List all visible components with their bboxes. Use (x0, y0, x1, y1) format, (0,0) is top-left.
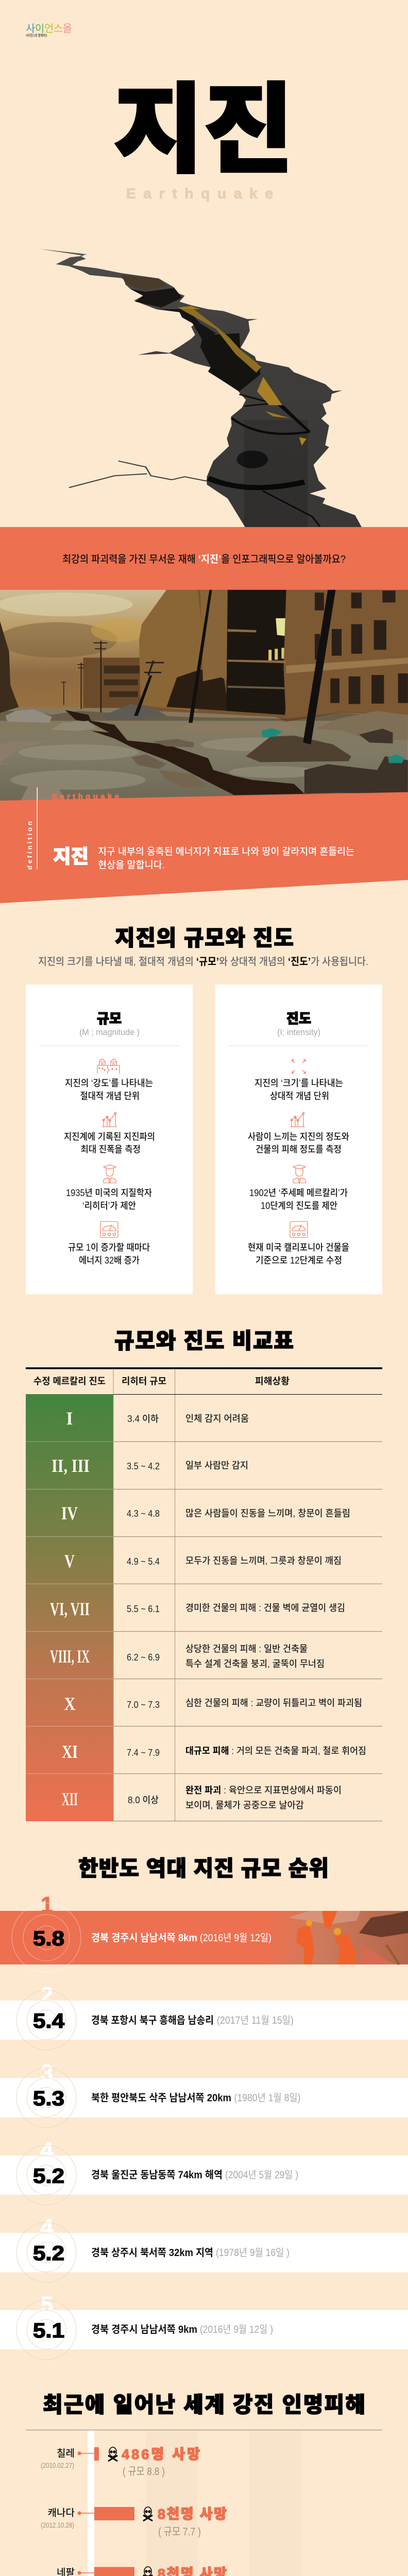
date: (2016년 9월 12일 ) (200, 2324, 273, 2335)
text: felt intensity: 건물의 피해 정도를 측정 (256, 1144, 342, 1155)
divider line (37, 787, 38, 869)
Richter values: 8.0 이상 (128, 1795, 159, 1805)
text: absolute unit: 절대적 개념 단위 (80, 1091, 140, 1101)
intro band (0, 527, 408, 590)
location: 경북 울진군 동남동쪽 74km 해역 (91, 2169, 223, 2181)
location: 경북 상주시 북서쪽 32km 지역 (91, 2247, 213, 2259)
damage descriptions: 특수 설계 건축물 붕괴, 굴뚝이 무너짐 (185, 1659, 325, 1669)
damage descriptions: 모두가 진동을 느끼며, 그릇과 창문이 깨짐 (185, 1556, 342, 1566)
epicentre rings (16, 2223, 76, 2282)
epicentre rings (12, 1903, 81, 1972)
table: magnitude vs intensity (26, 1367, 382, 1821)
photo: destroyed city street (0, 590, 408, 802)
intensity numerals: VIII, IX (50, 1646, 90, 1667)
damage descriptions: 많은 사람들이 진동을 느끼며, 창문이 흔들림 (185, 1509, 350, 1519)
damage descriptions (185, 1414, 366, 1810)
clipped label: Earthquake: Earthquake (52, 792, 119, 801)
value 5.8: 5.8 (33, 1927, 64, 1950)
value 5.4: 5.4 (33, 2010, 65, 2032)
intensity numerals: VI, VII (50, 1599, 90, 1619)
intensity numerals: IV (61, 1503, 78, 1523)
table header: 피해상황 (255, 1376, 290, 1386)
label: I intensity: (I; intensity) (277, 1027, 320, 1037)
value 5.2: 5.2 (33, 2242, 64, 2265)
title: 지진 (113, 76, 294, 185)
rank 4 row: Uljin (0, 2138, 408, 2205)
heading: 진도: 진도 (286, 1011, 311, 1026)
heading: magnitude and intensity: 지진의 규모와 진도 (115, 926, 294, 950)
intensity numerals: V (64, 1551, 75, 1571)
text: energy: 규모 1이 증가할 때마다 (68, 1243, 150, 1253)
damage descriptions: 대규모 피해 : 거의 모든 건축물 파괴, 철로 휘어짐 (185, 1745, 366, 1756)
rank number 2: 2 (41, 1982, 53, 2008)
icon: chart (102, 1112, 117, 1127)
Richter values: 3.5 ~ 4.2 (127, 1461, 160, 1471)
value 5.3: 5.3 (33, 2088, 64, 2110)
date: (1980년 1월 8일) (234, 2092, 301, 2104)
deaths: 486명 사망 (122, 2447, 200, 2462)
bar (94, 2567, 134, 2576)
icon: chart (290, 1112, 305, 1127)
icon: gauge (100, 1222, 118, 1238)
damage descriptions: 완전 파괴 : 육안으로 지표면상에서 파동이 (185, 1785, 342, 1795)
text: California: 현재 미국 캘리포니아 건물을 (248, 1243, 349, 1253)
definition text: 현상을 말합니다. (98, 859, 165, 871)
damage descriptions: 일부 사람만 감지 (185, 1460, 248, 1470)
icon: arrows (292, 1060, 305, 1073)
epicentre rings (16, 2145, 76, 2205)
rank number 3: 3 (41, 2060, 53, 2086)
icon: skull (108, 2447, 117, 2461)
label: M magnitude: (M ; magnitude ) (79, 1027, 140, 1037)
location: 북한 평안북도 삭주 남남서쪽 20km (91, 2092, 231, 2104)
heading: 지진: 지진 (53, 846, 89, 867)
text: California: 기준으로 12단계로 수정 (256, 1255, 342, 1265)
rank number 5: 5 (41, 2292, 53, 2317)
Richter values: 7.4 ~ 7.9 (127, 1748, 160, 1758)
icon: skull (143, 2567, 152, 2576)
text: seismograph: 최대 진폭을 측정 (80, 1144, 141, 1155)
icon: scholar (104, 1165, 116, 1183)
label: definition: definition (26, 821, 33, 870)
location: 경북 포항시 북구 흥해읍 남송리 (91, 2014, 214, 2026)
text: relative unit: 지진의 ‘크기’를 나타내는 (254, 1078, 343, 1088)
panel: magnitude (26, 985, 193, 1294)
panel: intensity (215, 985, 382, 1294)
epicentre rings (16, 2068, 76, 2128)
text: Richter: 1935년 미국의 지질학자 (66, 1188, 152, 1198)
intensity numerals: I (66, 1408, 73, 1429)
photo: rescue workers (268, 1911, 408, 1964)
country: 칠레 (57, 2448, 75, 2459)
heading: recent world earthquakes: 최근에 일어난 세계 강진 인명피해 (43, 2393, 365, 2417)
date: (2010.02.27) (41, 2461, 74, 2469)
row: Chile (41, 2447, 200, 2478)
Richter values: 6.2 ~ 6.9 (127, 1652, 160, 1663)
date: (2004년 5월 29일 ) (225, 2169, 298, 2181)
epicentre rings (16, 1990, 76, 2050)
Richter values: 4.3 ~ 4.8 (127, 1509, 160, 1519)
Richter values: 7.0 ~ 7.3 (127, 1700, 160, 1710)
intensity numerals: XII (62, 1789, 78, 1809)
damage descriptions: 인체 감지 어려움 (185, 1414, 249, 1424)
rank number 1: 1 (41, 1892, 53, 1918)
subtitle: Earthquake: Earthquake (126, 185, 273, 201)
bar (94, 2507, 134, 2520)
value 5.1: 5.1 (33, 2319, 64, 2342)
location: 경북 경주시 남남서쪽 8km (91, 1932, 197, 1944)
subheading: 지진의 크기를 나타낼 때, 절대적 개념의 ‘규모’와 상대적 개념의 ‘진도’가 사용됩니다. (38, 956, 368, 968)
icon: scholar (293, 1165, 305, 1183)
chart: earthquake casualties (26, 2430, 382, 2576)
Richter values: 5.5 ~ 6.1 (127, 1604, 160, 1614)
heading: 규모: 규모 (97, 1011, 122, 1026)
table header (33, 1376, 290, 1386)
rank number 4: 4 (40, 2215, 54, 2240)
bar (94, 2447, 99, 2461)
intensity numerals: II, III (52, 1455, 90, 1476)
intensity numerals (50, 1408, 90, 1809)
text: Mercalli: 1902년 ‘주세페 메르칼리’가 (249, 1188, 348, 1198)
intensity numerals: X (64, 1693, 75, 1714)
rank 1 row (0, 1892, 408, 1972)
location: 경북 경주시 남남서쪽 9km (91, 2324, 197, 2335)
illustration: ground crack (39, 249, 362, 527)
rank number 4: 4 (40, 2138, 54, 2163)
text: felt intensity: 사람이 느끼는 지진의 정도와 (248, 1131, 349, 1142)
table header: 수정 메르칼리 진도 (33, 1376, 106, 1386)
Richter values: 3.4 이하 (127, 1414, 159, 1424)
definition text: 지구 내부의 응축된 에너지가 지표로 나와 땅이 갈라지며 흔들리는 (98, 846, 354, 857)
text: absolute unit: 지진의 ‘강도’를 나타내는 (65, 1078, 153, 1088)
heading: Korean peninsula ranking: 한반도 역대 지진 규모 순위 (78, 1856, 329, 1880)
rank 2 row (0, 1982, 408, 2050)
intro sentence: 최강의 파괴력을 가진 무서운 재해 ‘지진’을 인포그래픽으로 알아볼까요? (62, 553, 346, 565)
magnitude: ( 규모 8.8 ) (123, 2466, 165, 2478)
damage descriptions: 상당한 건물의 피해 : 일반 건축물 (185, 1643, 308, 1654)
rank 5 row (0, 2292, 408, 2360)
magnitude: ( 규모 7.7 ) (158, 2526, 201, 2538)
Richter values (127, 1414, 160, 1805)
value 5.2: 5.2 (33, 2165, 64, 2188)
logo: 사이언스와 함께하는 (26, 33, 47, 38)
rank 4 row: Sangju (0, 2215, 408, 2282)
text: energy: 에너지 32배 증가 (79, 1255, 140, 1265)
text: Richter: ‘리히터’가 제안 (82, 1200, 136, 1211)
text: Mercalli: 10단계의 진도를 제안 (261, 1200, 337, 1211)
damage descriptions: 경미한 건물의 피해 : 건물 벽에 균열이 생김 (185, 1603, 345, 1613)
text: relative unit: 상대적 개념 단위 (270, 1091, 329, 1101)
damage descriptions: 심한 건물의 피해 : 교량이 뒤틀리고 벽이 파괴됨 (185, 1698, 362, 1708)
icon: cracked houses (97, 1059, 120, 1074)
logo: 사이언스올 (26, 23, 72, 35)
text: seismograph: 지진계에 기록된 지진파의 (64, 1131, 155, 1142)
icon: gauge (290, 1222, 308, 1238)
Richter values: 4.9 ~ 5.4 (127, 1556, 160, 1567)
table header: 리히터 규모 (122, 1376, 166, 1386)
damage descriptions: 보이며, 물체가 공중으로 날아감 (185, 1800, 304, 1810)
heading: comparison table: 규모와 진도 비교표 (114, 1329, 294, 1353)
intensity numerals: XI (62, 1741, 78, 1762)
date: (2016년 9월 12일) (200, 1932, 271, 1944)
deaths: 8천명 사망 (158, 2506, 227, 2522)
date: (2012.10.28) (41, 2521, 74, 2529)
icon: skull (143, 2507, 152, 2521)
date: (1978년 9월 16일 ) (216, 2247, 290, 2259)
date: (2017년 11월 15일) (217, 2014, 294, 2026)
row: Canada (41, 2506, 227, 2538)
epicentre rings (16, 2300, 76, 2360)
panel: definition (0, 787, 408, 903)
row: Nepal (41, 2566, 227, 2576)
rank 3 row (0, 2060, 408, 2128)
country: 캐나다 (48, 2507, 75, 2518)
